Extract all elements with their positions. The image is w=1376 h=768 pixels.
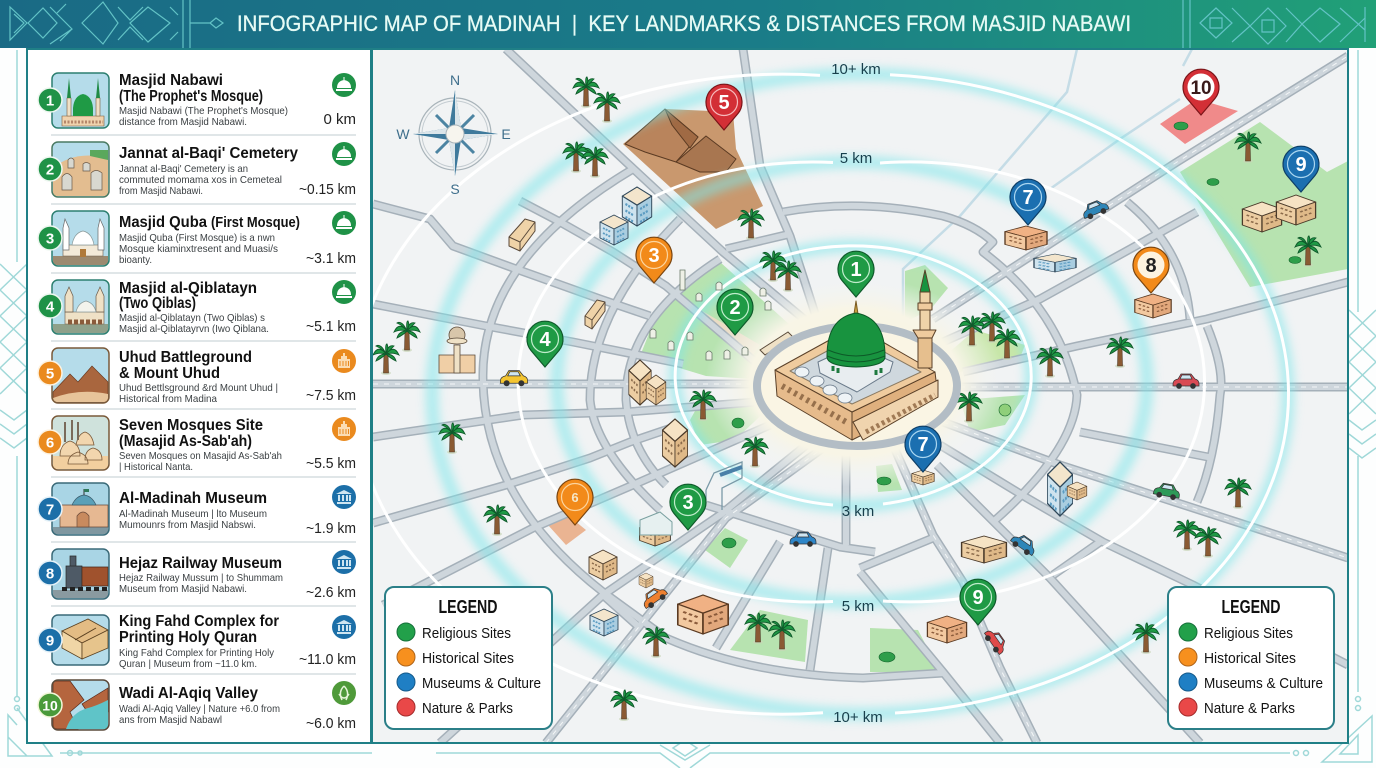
row 10: Wadi Al-Aqiq: 10 (42, 698, 58, 714)
pin 4: 4 (539, 329, 551, 351)
cars (500, 198, 1199, 656)
pin 9 green (960, 579, 996, 625)
row 10: Wadi Al-Aqiq (38, 680, 356, 732)
pin 1: 1 (850, 259, 862, 281)
cemetery graves (650, 270, 771, 360)
title: INFOGRAPHIC MAP OF MADINAH | KEY LANDMARKS & DISTANCES FROM MASJID NABAWI (237, 11, 1131, 36)
compass rose: E (501, 126, 511, 142)
legend right: Religious Sites (1204, 625, 1293, 642)
row 9: King Fahd Complex: King Fahd Complex for (119, 613, 279, 630)
parks and zones (548, 99, 1348, 672)
row 9: King Fahd Complex (38, 613, 356, 670)
row 1: Masjid Nabawi: (The Prophet's Mosque) (119, 88, 263, 105)
row 3: Masjid Quba: (First Mosque) (211, 214, 300, 231)
pin 5 (706, 84, 742, 130)
central mosque (757, 270, 957, 446)
compass rose: S (450, 181, 460, 197)
flat tan block west (585, 300, 605, 329)
row 6: Seven Mosques: 6 (46, 434, 54, 452)
row 4: Masjid al-Qiblatayn: ~5.1 km (306, 318, 356, 335)
wadi water lines (903, 49, 1192, 322)
map panel (355, 49, 1348, 743)
pin 1 (838, 251, 874, 297)
pin 9 blue: 9 (1295, 154, 1307, 176)
row 7: Al-Madinah Museum: 7 (46, 502, 54, 518)
plaza kiosk (640, 512, 672, 535)
legend right: Nature & Parks (1204, 700, 1295, 717)
row 6: Seven Mosques: ~5.5 km (306, 455, 356, 472)
ring labels: 5 km (842, 598, 874, 615)
row 5: Uhud Battleground: 5 (46, 366, 54, 382)
row 3: Masjid Quba (38, 211, 356, 267)
row 10: Wadi Al-Aqiq: Wadi Al-Aqiq Valley | Nature +6.0 from (119, 703, 280, 715)
legend left: Museums & Culture (422, 675, 541, 692)
legend left: Religious Sites (422, 625, 511, 642)
map border (372, 49, 1348, 743)
row 3: Masjid Quba: ~3.1 km (306, 250, 356, 267)
row 8: Hejaz Railway Museum (38, 549, 356, 601)
row 6: Seven Mosques: Seven Mosques on Masajid As-Sab'ah (119, 450, 282, 462)
row 5: Uhud Battleground: Uhud Battleground (119, 349, 252, 366)
central cream zone (705, 277, 1005, 487)
pin 3 orange: 3 (648, 245, 660, 267)
row 4: Masjid al-Qiblatayn: Masjid al-Qiblatayn (119, 280, 257, 297)
row 1: Masjid Nabawi: Masjid Nabawi (The Prophet's Mosque) (119, 105, 288, 117)
row 3: Masjid Quba: Masjid Quba (119, 214, 207, 231)
distance rings (355, 74, 1289, 714)
row 5: Uhud Battleground: ~7.5 km (306, 387, 356, 404)
row 4: Masjid al-Qiblatayn: Masjid al-Qiblatayn (Two Qiblas) s (119, 312, 265, 324)
buildings (589, 187, 1316, 643)
gate monument (706, 462, 742, 510)
row 8: Hejaz Railway Museum: Museum from Masjid Nabawi. (119, 583, 247, 595)
water tower (439, 327, 475, 373)
bushes (722, 122, 1301, 662)
row 4: Masjid al-Qiblatayn: (Two Qiblas) (119, 295, 196, 312)
row 8: Hejaz Railway Museum: Hejaz Railway Museum (119, 555, 282, 572)
legend left: Nature & Parks (422, 700, 513, 717)
legend right (1168, 587, 1334, 729)
cemetery gate building (760, 332, 793, 355)
ring labels (831, 61, 883, 726)
palm trees (373, 77, 1321, 721)
row 1: Masjid Nabawi: distance from Masjid Nabawi. (119, 116, 247, 128)
row 1: Masjid Nabawi: Masjid Nabawi (119, 72, 223, 89)
row 7: Al-Madinah Museum: ~1.9 km (306, 520, 356, 537)
row 1: Masjid Nabawi: 1 (46, 92, 54, 110)
row 4: Masjid al-Qiblatayn: 4 (46, 298, 55, 316)
row 3: Masjid Quba: Masjid Quba (First Mosque) is a nwn (119, 232, 275, 244)
row 7: Al-Madinah Museum (38, 483, 356, 537)
pin 6: 6 (571, 490, 579, 505)
row 1: Masjid Nabawi: 0 km (323, 111, 356, 128)
ring labels: 5 km (840, 150, 872, 167)
pin 2 (717, 289, 753, 335)
mountain (625, 109, 736, 172)
legend left (385, 587, 552, 729)
pin 7 south (905, 426, 941, 472)
row 6: Seven Mosques (38, 416, 356, 473)
pin 3 orange (636, 237, 672, 283)
row 5: Uhud Battleground (38, 348, 356, 405)
header banner (0, 0, 1376, 48)
row 8: Hejaz Railway Museum: 8 (46, 566, 54, 582)
compass rose: N (450, 72, 460, 88)
row 3: Masjid Quba: 3 (46, 230, 54, 248)
row 9: King Fahd Complex: Printing Holy Quran (119, 629, 257, 646)
pin 3 green (670, 484, 706, 530)
panel: landmark list (27, 49, 371, 743)
pin 9 blue (1283, 146, 1319, 192)
row 9: King Fahd Complex: King Fahd Complex for Printing Holy (119, 647, 275, 659)
pin 7 south: 7 (917, 434, 929, 456)
minaret (913, 270, 936, 368)
legend right: Museums & Culture (1204, 675, 1323, 692)
row 7: Al-Madinah Museum: Al-Madinah Museum | lto Museum (119, 508, 267, 520)
row 8: Hejaz Railway Museum: Hejaz Railway Mussum | to Shummam (119, 572, 283, 584)
row 9: King Fahd Complex: Quran | Museum from ~11.0 km. (119, 658, 257, 670)
row 1: Masjid Nabawi (38, 72, 356, 128)
pin 7 north: 7 (1022, 187, 1034, 209)
row 9: King Fahd Complex: 9 (46, 632, 54, 650)
pin 3 green: 3 (682, 492, 694, 514)
row 9: King Fahd Complex: ~11.0 km (299, 651, 356, 668)
row 3: Masjid Quba: bioanty. (119, 254, 152, 266)
legend left: Historical Sites (422, 650, 514, 667)
row 2: Jannat al-Baqi: ~0.15 km (299, 181, 356, 198)
road network (373, 49, 1348, 743)
row 10: Wadi Al-Aqiq: Wadi Al-Aqiq Valley (119, 685, 258, 702)
legend right: Historical Sites (1204, 650, 1296, 667)
row 5: Uhud Battleground: Historical from Madina (119, 393, 217, 405)
row 5: Uhud Battleground: Uhud Bettlsground &rd Mount Uhud | (119, 382, 278, 394)
pin 8: 8 (1145, 255, 1157, 277)
pin 8 (1133, 247, 1169, 293)
pin 9 green: 9 (972, 587, 984, 609)
compass rose (396, 72, 511, 197)
row 2: Jannat al-Baqi: from Masjid Nabawi. (119, 185, 203, 197)
row 7: Al-Madinah Museum: Al-Madinah Museum (119, 490, 267, 507)
legend right: LEGEND (1222, 597, 1280, 617)
row 2: Jannat al-Baqi: Jannat al-Baqi' Cemetery is an (119, 163, 248, 175)
ring labels: 10+ km (833, 709, 883, 726)
row 10: Wadi Al-Aqiq: ans from Masjid Nabawl (119, 714, 222, 726)
row 2: Jannat al-Baqi: commuted momama xos in Cemeteal (119, 174, 282, 186)
row 2: Jannat al-Baqi (38, 142, 356, 198)
pin 6 (557, 479, 593, 525)
legend left: LEGEND (438, 597, 498, 617)
pin 7 north (1010, 179, 1046, 225)
ring labels: 10+ km (831, 61, 881, 78)
ring labels: 3 km (842, 503, 874, 520)
pin 10 (1183, 69, 1219, 115)
pin 10: 10 (1190, 78, 1212, 99)
compass rose: W (396, 126, 410, 142)
pin 5: 5 (718, 92, 730, 114)
row 3: Masjid Quba: Mosque kiaminxtresent and Muasi/s (119, 243, 278, 255)
pin 4 (527, 321, 563, 367)
flat tan block northwest (509, 219, 535, 251)
row 7: Al-Madinah Museum: Mumounrs from Masjid Nabswi. (119, 519, 256, 531)
row 6: Seven Mosques: Seven Mosques Site (119, 417, 263, 434)
row 10: Wadi Al-Aqiq: ~6.0 km (306, 715, 356, 732)
row 2: Jannat al-Baqi: Jannat al-Baqi' Cemetery (119, 145, 298, 162)
row 6: Seven Mosques: | Historical Nanta. (119, 461, 193, 473)
row 2: Jannat al-Baqi: 2 (46, 162, 54, 178)
row 8: Hejaz Railway Museum: ~2.6 km (306, 584, 356, 601)
row 6: Seven Mosques: (Masajid As-Sab'ah) (119, 433, 252, 450)
row 5: Uhud Battleground: & Mount Uhud (119, 365, 220, 382)
row 4: Masjid al-Qiblatayn: Masjid al-Qiblatayrvn (Iwo Qiblana. (119, 323, 269, 335)
row 4: Masjid al-Qiblatayn (38, 280, 356, 335)
pin 2: 2 (729, 297, 741, 319)
